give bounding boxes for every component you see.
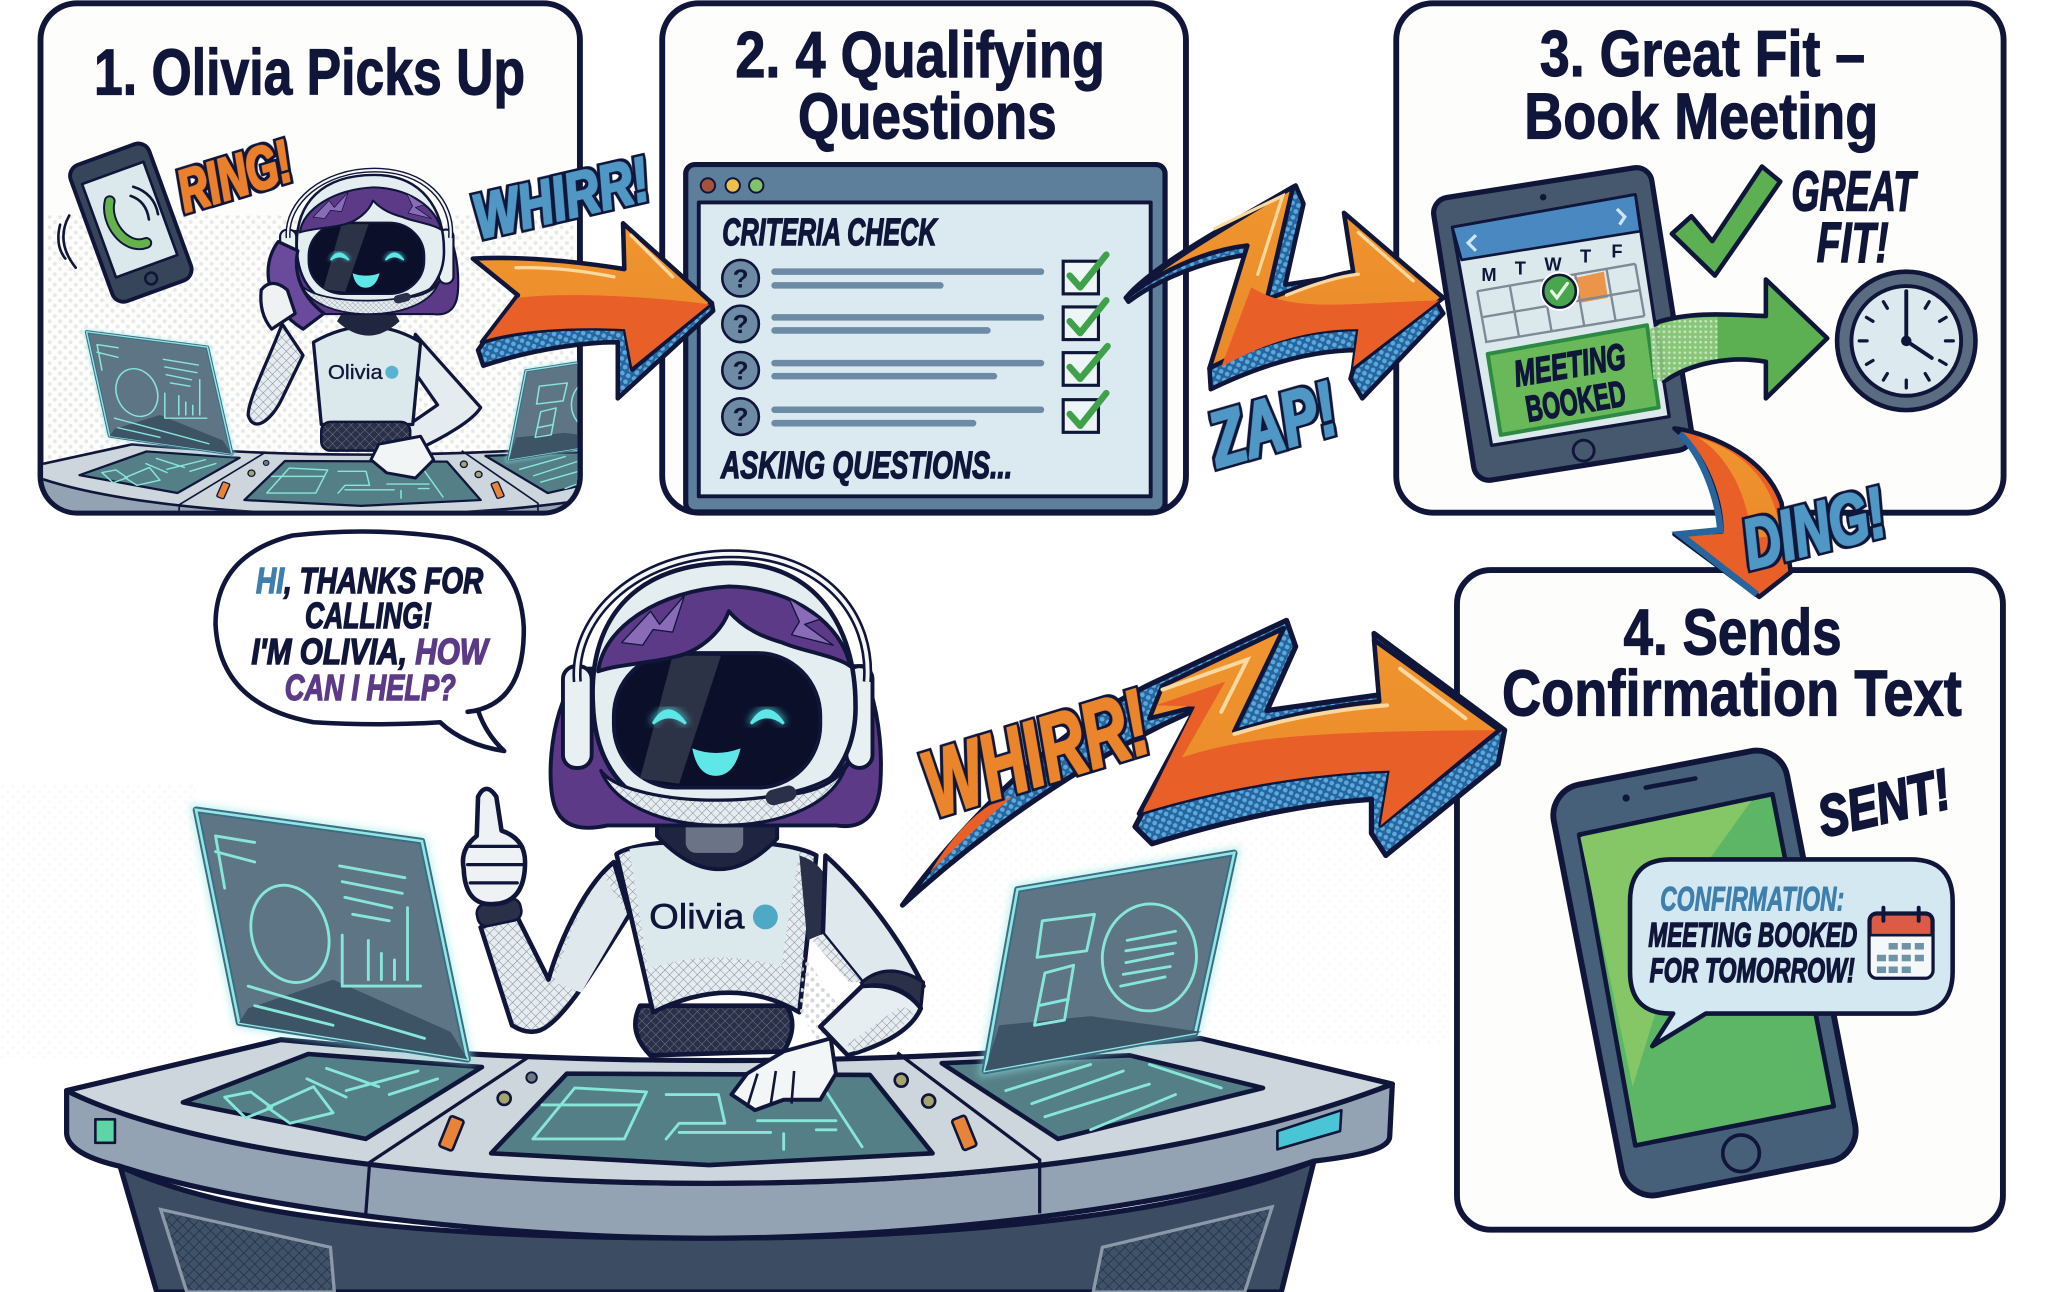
title: step 2: Questions [798,79,1057,152]
confirmation message bubble: MEETING BOOKED [1648,916,1857,954]
panel 2: 4 qualifying questions [662,3,1186,513]
speech bubble: greeting [216,532,524,751]
arrow: step 3 to step 4 [1674,428,1791,597]
label: sent: SENT! [1812,758,1956,850]
icon: smartphone [1548,745,1861,1201]
meeting booked badge [1488,325,1659,435]
title: step 4 [1502,595,1962,730]
sound effect: WHIRR blue: WHIRR! [467,144,656,253]
label: great fit: FIT! [1817,211,1889,274]
question rows with checkmarks: ? [733,402,749,432]
status text: ASKING QUESTIONS... [720,445,1012,487]
question rows with checkmarks: ? [733,309,749,339]
small robot head [273,170,458,315]
title: step 3 [1524,17,1878,152]
purple telephone handset [261,242,324,329]
question rows with checkmarks: ? [733,263,749,293]
icon: big green check [1672,167,1780,276]
title: step 2 [735,18,1105,152]
small console and screens [17,332,727,568]
speech bubble: greeting: I'M OLIVIA, HOW [251,631,491,672]
robot chest label: Olivia [328,362,383,384]
vents [161,1207,1272,1292]
label: great fit [1791,159,1918,274]
panel 4: sends confirmation text [1457,570,2003,1230]
icon: clock [1837,272,1975,410]
speech bubble: greeting: HI, THANKS FOR [256,560,484,601]
calendar weekdays: T [1515,257,1526,278]
speech bubble: greeting: CAN I HELP? [285,667,456,708]
title: step 1: 1. Olivia Picks Up [94,36,525,109]
meeting booked badge: BOOKED [1523,373,1629,430]
arrow: step 1 to step 2 [473,223,713,398]
tablet with calendar [1431,165,1694,482]
sound effect: ZAP: ZAP! [1198,364,1346,484]
holographic screen left [196,810,468,1059]
title: step 2: 2. 4 Qualifying [735,18,1105,91]
robot head [551,554,881,828]
console buttons and lights [95,1072,1341,1151]
question rows with checkmarks: ? [733,355,749,385]
confirmation message bubble: FOR TOMORROW! [1650,952,1855,990]
console with holographic screens [67,810,1392,1292]
panel 3: great fit, book meeting [1396,3,2004,513]
label: great fit: GREAT [1791,159,1918,222]
title: step 3: Book Meeting [1524,79,1878,152]
calendar weekdays: M [1481,264,1497,285]
panel 1: Olivia picks up [38,0,583,516]
title: step 3: 3. Great Fit – [1540,17,1865,90]
calendar weekdays [1481,240,1623,285]
title: step 4: Confirmation Text [1502,657,1962,730]
confirmation message bubble: CONFIRMATION: [1660,880,1844,918]
console base [120,1161,1314,1292]
chest label: Olivia [649,898,745,937]
icon: calendar [1869,908,1933,978]
question rows with checkmarks [722,255,1108,435]
sound effect: WHIRR orange: WHIRR! [910,669,1161,837]
robot right arm and hand [731,855,923,1110]
robot torso [616,816,831,1055]
title: step 4: 4. Sends [1624,595,1842,668]
big arrow: robot to step 4 [903,620,1505,905]
calendar weekdays: W [1544,253,1562,274]
meeting booked badge: MEETING [1511,336,1629,394]
robot left arm with thumbs up [463,789,630,1032]
console top surface [67,1038,1392,1183]
speech bubble: greeting: CALLING! [305,595,432,636]
sound effect: DING: DING! [1735,473,1893,585]
arrow: step 2 to step 3 [1126,185,1443,398]
browser window [686,165,1165,512]
calendar weekdays: T [1580,246,1591,267]
holographic screen right [985,853,1234,1071]
console touch screens [183,1054,1263,1165]
small robot body [248,308,481,478]
green arrow to clock [1650,280,1827,398]
sound effect: RING: RING! [170,128,299,225]
calendar weekdays: F [1611,240,1623,261]
robot Olivia [463,554,923,1110]
confirmation message bubble [1630,859,1953,1046]
icon: ringing phone [58,140,195,305]
console front face [67,1084,1392,1238]
heading: criteria check: CRITERIA CHECK [722,212,938,254]
